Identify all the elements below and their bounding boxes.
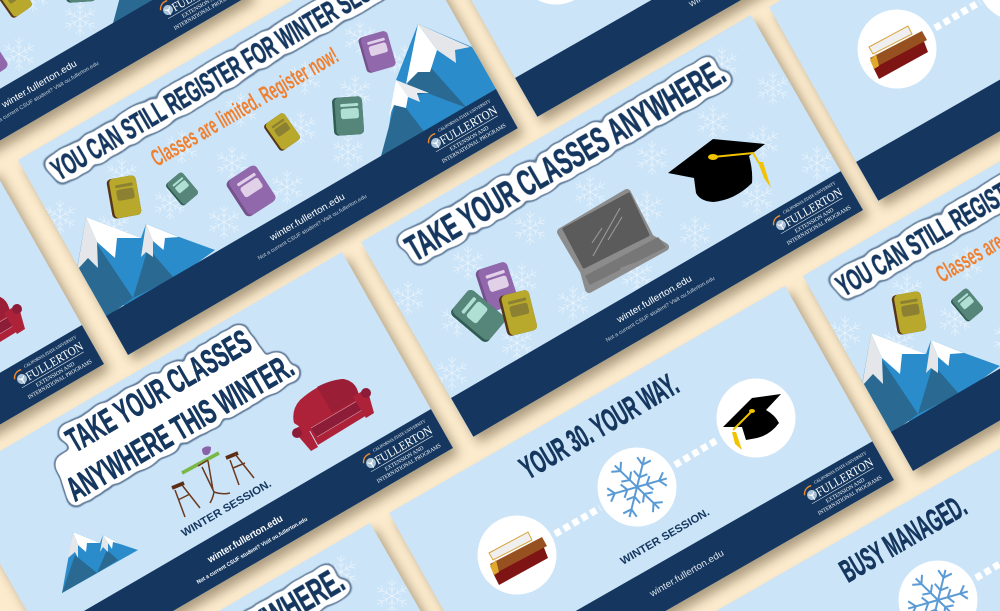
icon: purple book stack: [476, 262, 516, 310]
band: [451, 171, 875, 457]
logo: CALIFORNIA STATE UNIVERSITY: [813, 450, 868, 485]
logo: [769, 180, 852, 248]
band: [476, 441, 907, 611]
logo: EXTENSION AND: [825, 477, 866, 505]
logo: INTERNATIONAL PROGRAMS: [376, 443, 442, 485]
icon: mountains right: [380, 24, 500, 160]
logo: EXTENSION AND: [449, 125, 490, 153]
panel: winter banner, left edge: [0, 168, 116, 611]
logo: FULLERTON: [23, 339, 86, 383]
dotted connector: [555, 439, 719, 534]
panel: your 30 banner, top right: [769, 0, 1000, 221]
heading: YOUR 30. YOUR WAY.: [513, 366, 684, 486]
icon: books in circle: [478, 516, 556, 594]
logo: INTERNATIONAL PROGRAMS: [817, 475, 883, 517]
url: winter.fullerton.edu: [205, 513, 285, 566]
logo: EXTENSION AND: [35, 361, 76, 389]
panel: register banner, right edge: [803, 49, 1000, 493]
logo: CALIFORNIA STATE UNIVERSITY: [372, 418, 427, 453]
logo: CALIFORNIA STATE UNIVERSITY: [23, 334, 78, 369]
logo: CALIFORNIA STATE UNIVERSITY: [437, 98, 492, 133]
icon: purple book: [225, 164, 277, 218]
logo: INTERNATIONAL PROGRAMS: [441, 123, 507, 165]
icon: graduation cap: [668, 139, 771, 202]
url: winter.fullerton.edu: [647, 548, 726, 600]
logo: [359, 418, 442, 486]
heading: [60, 323, 300, 509]
tagline: WINTER SESSION.: [179, 478, 274, 540]
note: Not a current CSUF student? Visit ou.fullerton.edu: [605, 276, 716, 344]
url: winter.fullerton.edu: [0, 58, 79, 111]
icon: teal book stack: [451, 290, 504, 342]
icon: teal book upright: [332, 96, 364, 136]
icon: mountains left: [70, 217, 215, 320]
panel: anywhere banner, centre: [361, 15, 875, 457]
heading: ANYWHERE THIS WINTER.: [60, 347, 300, 509]
panel: register banner, top left corner: [0, 0, 262, 244]
note: Not a current CSUF student? Visit ou.fullerton.edu: [257, 194, 368, 262]
band: [106, 89, 530, 377]
logo: FULLERTON: [372, 423, 435, 467]
logo: FULLERTON: [782, 185, 845, 229]
logo: EXTENSION AND: [794, 207, 835, 235]
logo: INTERNATIONAL PROGRAMS: [27, 359, 93, 401]
logo: FULLERTON: [437, 103, 500, 147]
icon: graduation cap in circle: [716, 378, 796, 458]
tagline: WINTER SESSION.: [618, 506, 712, 568]
icon: bistro table: [172, 446, 254, 517]
url: winter.fullerton.edu: [614, 273, 694, 326]
icon: sofa: [292, 379, 374, 451]
logo: [10, 334, 93, 402]
heading: TAKE YOUR CLASSES: [60, 323, 258, 460]
logo: EXTENSION AND: [384, 445, 425, 473]
note: Not a current CSUF student? Visit ou.fullerton.edu: [196, 516, 309, 586]
icon: small mountains: [62, 532, 138, 593]
logo: INTERNATIONAL PROGRAMS: [786, 205, 852, 247]
url: winter.fullerton.edu: [267, 191, 347, 244]
icon: yellow book small: [263, 112, 301, 152]
icon: purple book upright: [358, 30, 396, 74]
panel: anywhere this winter banner, bottom left: [0, 252, 465, 611]
logo: [424, 98, 507, 166]
icon: snowflake in circle: [598, 448, 676, 526]
logo: CALIFORNIA STATE UNIVERSITY: [782, 180, 837, 215]
logo: FULLERTON: [813, 455, 876, 499]
panel: register banner, top left full view: [18, 0, 530, 377]
icon: laptop: [561, 193, 665, 289]
icon: yellow book stack: [498, 289, 538, 337]
logo: [800, 450, 883, 518]
icon: teal book: [165, 171, 199, 207]
panel: your 30 your way banner, bottom centre: [389, 286, 907, 611]
icon: yellow book: [106, 175, 142, 219]
band: [41, 409, 465, 611]
